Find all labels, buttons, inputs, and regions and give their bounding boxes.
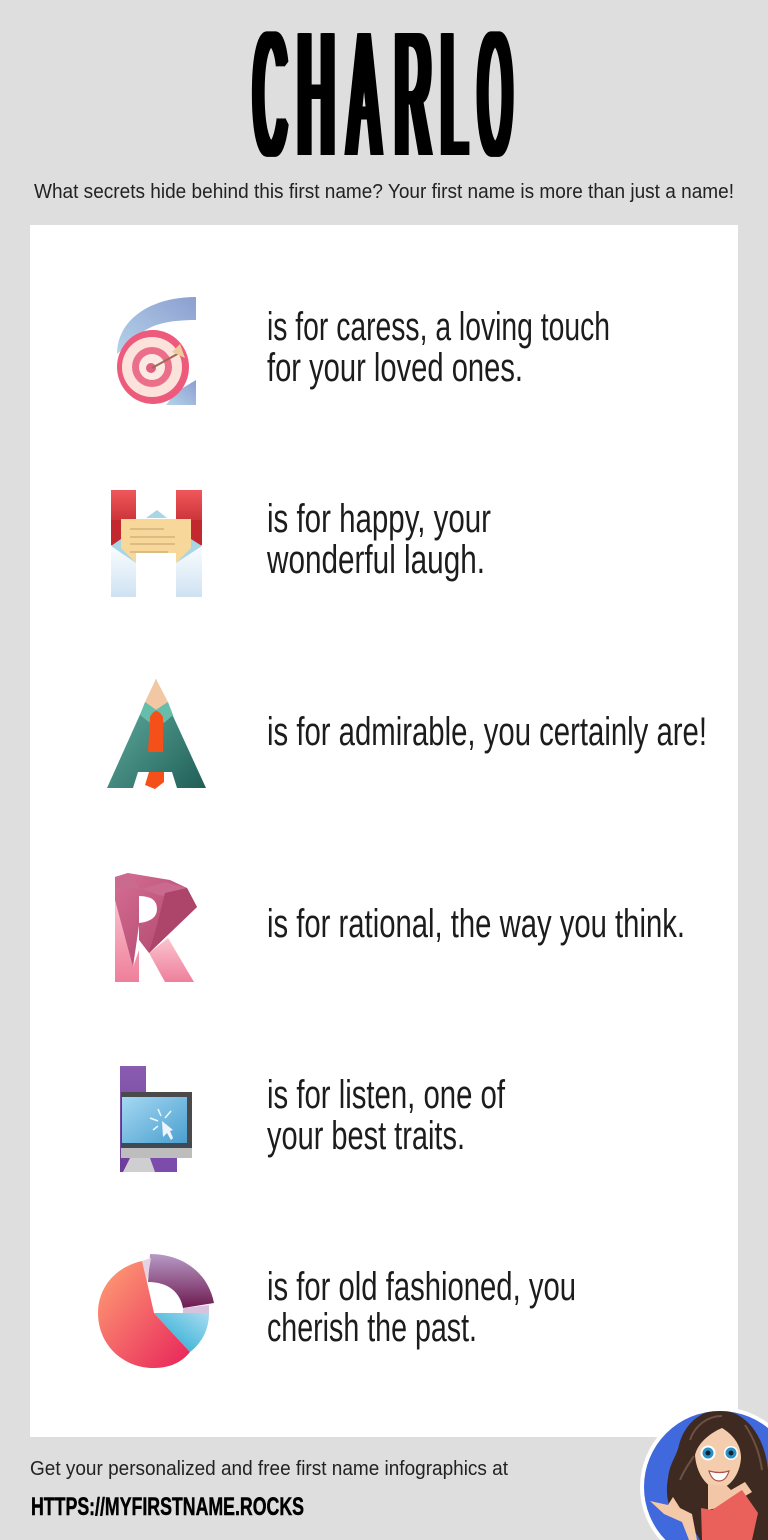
icon: letter A with tie (107, 679, 206, 789)
title: H (298, 0, 334, 193)
text: letter O: cherish the past. (267, 1306, 477, 1350)
avatar (640, 1407, 768, 1540)
text: letter H: is for happy, your (267, 497, 491, 541)
text: letter L: your best traits. (267, 1114, 465, 1158)
icon: letter C with target (117, 297, 196, 405)
subtitle: What secrets hide behind this first name? Your first name is more than just a name! (34, 181, 734, 203)
text: letter H: wonderful laugh. (266, 538, 485, 582)
icon: letter H with envelope (111, 490, 202, 597)
icon: letter R with gem (115, 873, 197, 982)
text: letter O: is for old fashioned, you (267, 1265, 576, 1309)
text: letter C: is for caress, a loving touch (267, 305, 610, 349)
icon: pie chart letter O (98, 1254, 214, 1368)
panel: name letters (30, 225, 738, 1437)
text: letter H (266, 497, 491, 582)
text: letter C (267, 305, 610, 390)
title: O (479, 0, 512, 193)
text: letter L: is for listen, one of (267, 1073, 506, 1117)
footer url: HTTPS://MYFIRSTNAME.ROCKS (31, 1493, 304, 1521)
text: letter O (267, 1265, 576, 1350)
icon: letter L with monitor (120, 1066, 192, 1172)
title: A (349, 0, 379, 193)
text: letter L (267, 1073, 506, 1158)
title (252, 0, 514, 193)
title: R (396, 0, 431, 193)
title: C (254, 0, 286, 193)
text: letter C: for your loved ones. (267, 346, 523, 390)
footer text: Get your personalized and free first name infographics at (30, 1458, 508, 1480)
title: L (441, 0, 467, 193)
